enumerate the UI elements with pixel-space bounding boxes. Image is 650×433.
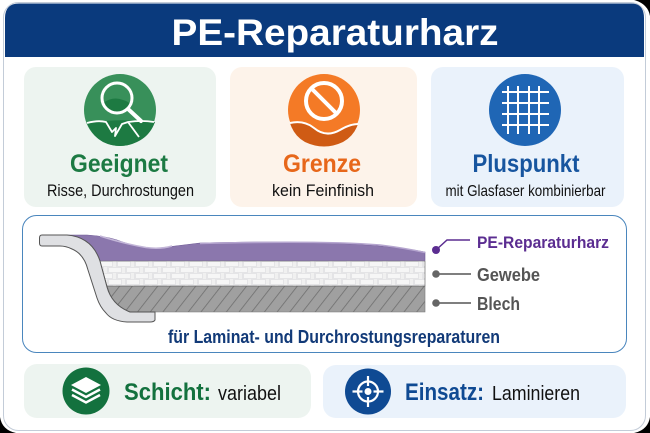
text: kein Feinfinish bbox=[272, 181, 374, 200]
panel: Geeignet bbox=[24, 67, 216, 207]
heading: Geeignet bbox=[70, 150, 169, 178]
panel: Schicht: variabel bbox=[218, 383, 281, 405]
panel: Pluspunkt bbox=[431, 67, 624, 207]
callout: Blech bbox=[432, 294, 520, 314]
panel: Einsatz: Laminieren bbox=[492, 383, 580, 405]
callout: PE-Reparaturharz bbox=[432, 233, 609, 254]
icon: glass fibre mesh bbox=[489, 74, 561, 146]
callout: Blech: Blech bbox=[477, 294, 520, 314]
icon: no sign over wave bbox=[288, 74, 360, 146]
text: mit Glasfaser kombinierbar bbox=[446, 183, 606, 200]
fabric layer bbox=[100, 261, 425, 286]
title: PE-Reparaturharz bbox=[172, 12, 498, 53]
resin layer bbox=[67, 235, 425, 260]
caption: für Laminat- und Durchrostungsreparaturen bbox=[168, 327, 500, 347]
icon: layers bbox=[62, 368, 110, 414]
callout: Gewebe bbox=[432, 265, 540, 285]
icon: target bbox=[345, 368, 391, 414]
heading: Pluspunkt bbox=[472, 150, 580, 178]
text: Einsatz: bbox=[405, 379, 484, 406]
steel sheet layer bbox=[107, 286, 425, 312]
icon: magnifier over crack bbox=[84, 74, 156, 146]
curved metal edge bbox=[40, 235, 155, 322]
title banner bbox=[5, 4, 644, 57]
heading: Grenze bbox=[283, 150, 361, 178]
panel: layer diagram bbox=[22, 216, 626, 352]
panel: Grenze bbox=[230, 67, 417, 207]
callout: Gewebe: Gewebe bbox=[477, 265, 540, 285]
text: Risse, Durchrostungen bbox=[47, 181, 194, 200]
text: Schicht: bbox=[124, 379, 211, 406]
panel: Einsatz bbox=[323, 365, 626, 418]
panel: Schicht bbox=[24, 364, 311, 418]
callout: PE-Reparaturharz: PE-Reparaturharz bbox=[477, 233, 609, 252]
